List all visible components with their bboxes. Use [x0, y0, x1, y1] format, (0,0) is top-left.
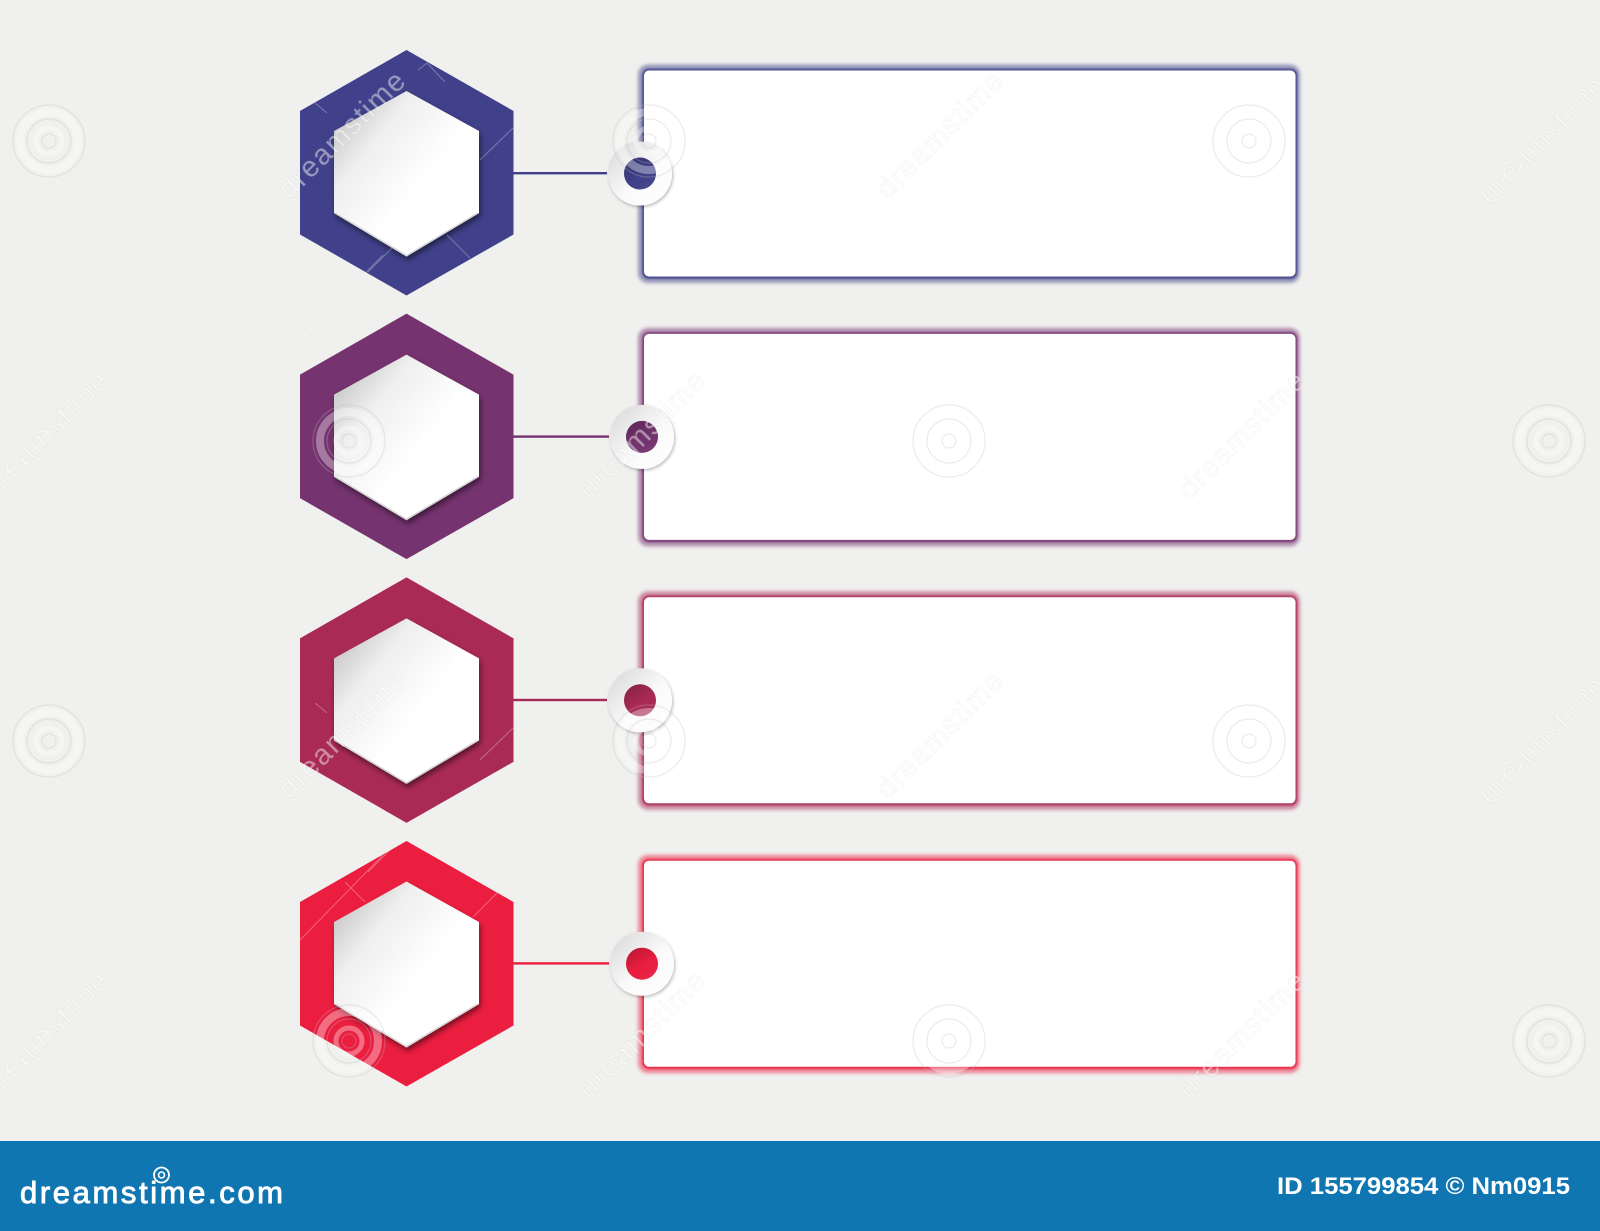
- watermark text: dreamstime: [572, 364, 713, 505]
- footer banner: [0, 1141, 1600, 1231]
- logo text: dreamstime.com: [20, 1175, 283, 1210]
- watermark text: dreamstime: [870, 64, 1011, 205]
- text card 1: [638, 64, 1300, 283]
- hexagon 1: [300, 50, 514, 296]
- watermark text: dreamstime: [1172, 364, 1313, 505]
- hexagon 4: [300, 841, 514, 1086]
- row 2: plum: [300, 314, 1300, 559]
- watermark text: dreamstime: [1172, 964, 1313, 1105]
- image id and credit: ID 155799854 © Nm0915: [1277, 1173, 1570, 1200]
- watermark text: dreamstime: [272, 64, 413, 205]
- hexagon 3: [300, 577, 514, 823]
- watermark hairlines: [300, 63, 513, 940]
- watermark text: dreamstime: [870, 664, 1011, 805]
- text card 2: [638, 328, 1300, 546]
- logo spiral icon: [154, 1168, 169, 1182]
- row 1: indigo: [300, 50, 1300, 296]
- connector line 4: [513, 962, 609, 965]
- node 4: [610, 932, 674, 996]
- hexagon 2: [300, 314, 514, 559]
- row 3: crimson: [300, 577, 1300, 823]
- connector line 2: [513, 435, 609, 438]
- connector line 1: [513, 172, 607, 174]
- watermark spirals: [13, 105, 1585, 1077]
- text card 4: [638, 855, 1300, 1073]
- node 3: [608, 668, 672, 732]
- node 2: [610, 405, 674, 469]
- node 1: [608, 142, 672, 206]
- row 4: red: [300, 841, 1300, 1086]
- watermark text: dreamstime: [272, 664, 413, 805]
- connector line 3: [513, 699, 607, 701]
- watermark text: dreamstime: [572, 964, 713, 1105]
- text card 3: [638, 591, 1300, 810]
